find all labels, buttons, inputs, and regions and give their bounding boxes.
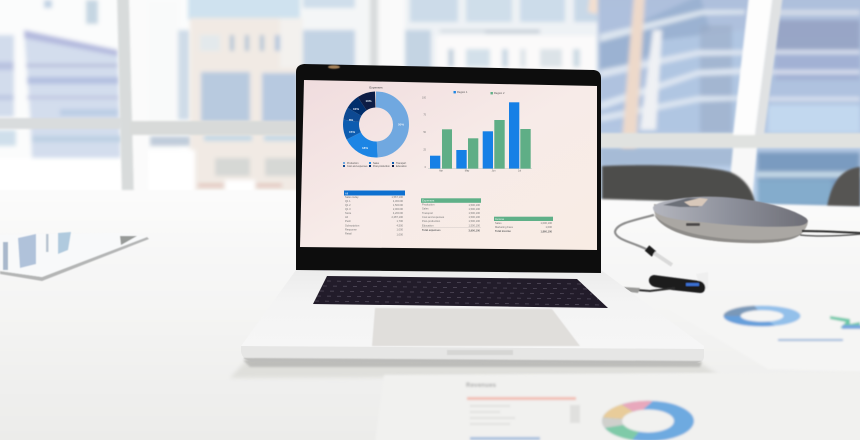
window frame mullions bbox=[0, 0, 860, 200]
donut rings bbox=[351, 100, 401, 150]
income table rows: 2,287,100 bbox=[391, 215, 404, 219]
expenses table rows: 1,500,100 bbox=[468, 219, 481, 223]
income table rows: 4,500 bbox=[396, 224, 404, 228]
usb dongle bbox=[623, 272, 708, 293]
income table rows bbox=[345, 195, 404, 236]
window background: right side glass tower bbox=[598, 0, 860, 207]
donut legend: Transport bbox=[396, 162, 406, 165]
donut percentage labels: 50% bbox=[398, 122, 404, 126]
donut legend: Post-production bbox=[373, 165, 390, 168]
desk surface bbox=[0, 190, 860, 440]
income table rows: 1,000 bbox=[396, 232, 404, 236]
expenses table rows: Transport bbox=[422, 211, 433, 215]
window background: central building bbox=[147, 0, 620, 198]
income table rows: Sales today bbox=[345, 195, 359, 199]
bar chart axis labels: 0 bbox=[425, 166, 427, 169]
laptop bbox=[241, 64, 704, 367]
bar chart legend: Region 2 bbox=[494, 91, 505, 95]
expenses table rows: 1,500,100 bbox=[468, 203, 481, 207]
expenses table rows bbox=[422, 202, 481, 227]
bar chart axis labels: 50 bbox=[423, 131, 427, 134]
dashboard: expenses table: Expenses bbox=[422, 199, 435, 203]
income table rows: 4,200.00 bbox=[393, 211, 404, 215]
laptop front edge bbox=[241, 346, 704, 363]
window background: left side bbox=[0, 0, 320, 210]
laptop base deck bbox=[241, 270, 704, 352]
income table rows: Push bbox=[345, 219, 351, 223]
income table rows: Store bbox=[345, 211, 352, 215]
income table rows: Q1 2 bbox=[345, 203, 351, 207]
expenses table rows: 1,500,100 bbox=[468, 207, 481, 211]
printed report sheet bottom bbox=[374, 372, 860, 440]
report donut chart bottom bbox=[612, 405, 684, 437]
laptop lid bezel bbox=[296, 64, 601, 273]
webcam reflection bbox=[328, 65, 340, 69]
bars region 1 bbox=[430, 102, 519, 168]
expenses table total: Total expenses bbox=[422, 228, 441, 232]
donut legend: Education bbox=[396, 165, 407, 168]
income table rows: Q1 3 bbox=[345, 207, 351, 211]
report table rows bbox=[470, 405, 580, 425]
expenses table rows: Cost and expenses bbox=[422, 215, 445, 219]
dashboard: income table: All bbox=[345, 191, 348, 195]
tablet on desk bbox=[0, 232, 149, 281]
expenses table total bbox=[421, 228, 481, 232]
report table header bbox=[467, 397, 576, 400]
donut percentage labels: 18% bbox=[362, 146, 368, 150]
dashboard: income summary table bbox=[494, 217, 553, 233]
bar chart month labels bbox=[439, 170, 521, 172]
donut percentage labels: 8% bbox=[349, 118, 353, 122]
summary table total: 1,860,100 bbox=[540, 229, 553, 233]
printed report sheet right bbox=[650, 293, 860, 372]
bar chart axis labels: 100 bbox=[422, 96, 427, 100]
income table header bbox=[344, 190, 405, 196]
speaker puck bbox=[653, 197, 808, 243]
income table rows: Subscription bbox=[345, 224, 360, 228]
bar chart axis labels bbox=[422, 96, 427, 169]
summary table rows: Marketing Fees bbox=[495, 225, 514, 229]
income table rows: Retail bbox=[345, 232, 352, 236]
income table rows: Q1 1 bbox=[345, 199, 351, 203]
report rule bbox=[778, 339, 843, 341]
summary table rows: 1,000,100 bbox=[540, 221, 553, 225]
expenses table total: 3,900,100 bbox=[468, 228, 481, 232]
income table rows: Response bbox=[345, 228, 357, 232]
donut legend bbox=[343, 162, 407, 168]
dashboard: income summary table: Income bbox=[495, 217, 505, 221]
bar chart legend: Region 1 bbox=[457, 90, 468, 94]
summary table header bbox=[494, 217, 553, 221]
donut legend: Cost and expenses bbox=[347, 165, 368, 168]
expenses table rows: Post-production bbox=[422, 219, 441, 223]
summary table total: Total income bbox=[495, 229, 511, 233]
expenses table rows: 1,500,100 bbox=[468, 223, 481, 227]
report mini chart bbox=[830, 316, 860, 329]
cables bbox=[615, 215, 860, 265]
chairs behind desk bbox=[602, 165, 860, 207]
dashboard: expenses table bbox=[421, 198, 481, 232]
dashboard: income table bbox=[344, 190, 405, 236]
income table rows: 2,000.00 bbox=[393, 207, 404, 211]
laptop shadow bbox=[243, 360, 702, 367]
summary table rows bbox=[495, 221, 553, 229]
bar chart baseline bbox=[428, 168, 532, 170]
expenses table rows: Sales bbox=[422, 207, 429, 211]
summary table total bbox=[495, 229, 553, 233]
report heading: Revenues bbox=[466, 383, 497, 389]
donut percentage labels: 15% bbox=[349, 130, 355, 134]
bar chart month labels: Apr bbox=[439, 170, 443, 172]
bar chart month labels: Jul bbox=[518, 170, 521, 172]
donut title: Expenses bbox=[369, 86, 383, 90]
dashboard: bar chart bbox=[422, 90, 532, 172]
laptop screen bbox=[300, 80, 597, 250]
expenses table rows: Education bbox=[422, 223, 434, 227]
bar chart axis labels: 25 bbox=[423, 148, 427, 152]
income table rows: 1,700 bbox=[396, 219, 404, 223]
bars region 2 bbox=[442, 120, 531, 168]
laptop front notch bbox=[447, 350, 513, 355]
keyboard bbox=[313, 276, 608, 308]
donut percentage labels bbox=[349, 99, 404, 150]
expenses table rows: 1,500,100 bbox=[468, 211, 481, 215]
donut percentage labels: 10% bbox=[365, 99, 372, 103]
income table rows: 4,300.00 bbox=[393, 199, 404, 203]
bar chart month labels: Jun bbox=[492, 170, 496, 172]
bar chart month labels: May bbox=[465, 170, 470, 172]
income table rows: 1,567,100 bbox=[391, 195, 404, 199]
expenses table rows: 1,500,100 bbox=[468, 215, 481, 219]
summary table rows: Sales bbox=[495, 221, 502, 225]
donut legend: Sales bbox=[373, 162, 380, 165]
expenses table header bbox=[421, 198, 481, 203]
bar chart legend bbox=[454, 90, 505, 95]
donut percentage labels: 10% bbox=[353, 107, 359, 111]
desk shade under laptop bbox=[230, 362, 720, 378]
report donut chart bbox=[732, 308, 792, 324]
income table rows: All bbox=[345, 215, 348, 219]
report blue header bbox=[470, 437, 540, 440]
trackpad bbox=[372, 308, 580, 346]
bar chart axis labels: 75 bbox=[423, 114, 427, 116]
income table rows: 1,000 bbox=[396, 228, 404, 232]
summary table rows: 1,000 bbox=[546, 225, 553, 229]
dashboard: expenses donut bbox=[343, 86, 407, 168]
donut legend: Production bbox=[347, 162, 359, 165]
income table rows: 1,500.00 bbox=[393, 203, 404, 207]
expenses table rows: Production bbox=[422, 202, 435, 206]
